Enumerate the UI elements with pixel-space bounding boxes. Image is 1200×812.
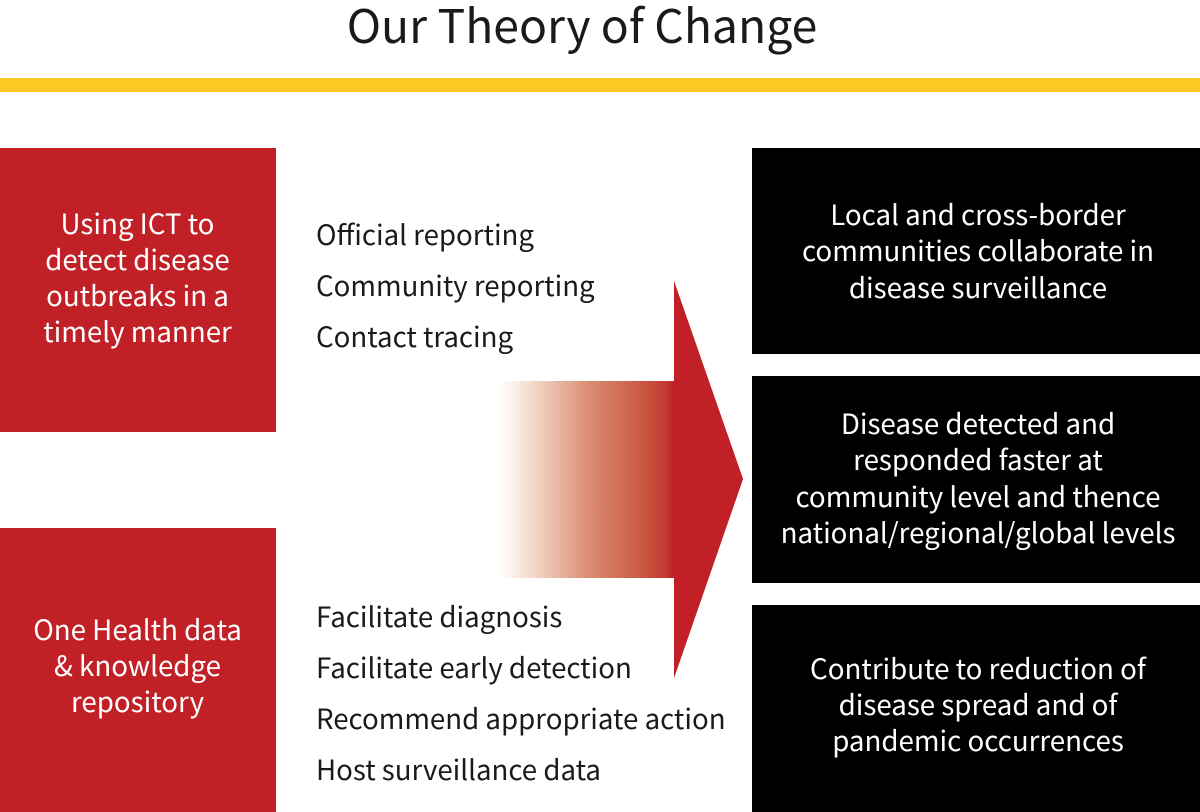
panel: outcome collaboration <box>752 148 1200 354</box>
panel: outcome collaboration: communities collaborate in <box>802 229 1154 269</box>
panel: outcome reduced spread: disease spread and of <box>839 683 1117 723</box>
list: reporting activities: Official reporting <box>316 213 534 253</box>
panel: outcome reduced spread <box>752 605 1200 812</box>
panel: outcome faster detection: community level and thence <box>795 474 1161 514</box>
panel: repository input: & knowledge <box>54 644 221 684</box>
panel: outcome faster detection: responded faster at <box>853 438 1103 478</box>
list: reporting activities: Contact tracing <box>316 315 513 355</box>
list: repository functions: Facilitate early detection <box>316 646 632 686</box>
panel: ICT input: timely manner <box>43 310 232 350</box>
panel: outcome collaboration: Local and cross-border <box>830 193 1126 233</box>
panel: ICT input: Using ICT to <box>61 202 214 242</box>
panel: ICT input <box>0 148 276 432</box>
list: repository functions: Recommend appropriate action <box>316 697 726 737</box>
panel: outcome reduced spread: Contribute to reduction of <box>810 647 1146 687</box>
panel: ICT input: outbreaks in a <box>46 274 229 314</box>
list: reporting activities: Community reporting <box>316 264 595 304</box>
panel: outcome faster detection: national/regional/global levels <box>781 511 1175 551</box>
list: repository functions: Facilitate diagnosis <box>316 595 562 635</box>
panel: repository input <box>0 528 276 812</box>
panel: outcome reduced spread: pandemic occurrences <box>832 719 1124 759</box>
panel: ICT input: detect disease <box>45 238 230 278</box>
yellow rule <box>0 78 1200 92</box>
panel: repository input: One Health data <box>33 608 242 648</box>
panel: outcome faster detection <box>752 376 1200 583</box>
arrow <box>505 281 743 678</box>
panel: outcome collaboration: disease surveillance <box>849 266 1107 306</box>
panel: outcome faster detection: Disease detected and <box>841 402 1115 442</box>
list: repository functions: Host surveillance data <box>316 748 601 788</box>
panel: repository input: repository <box>71 680 204 720</box>
list: reporting activities <box>316 213 595 355</box>
list: repository functions <box>316 595 726 788</box>
